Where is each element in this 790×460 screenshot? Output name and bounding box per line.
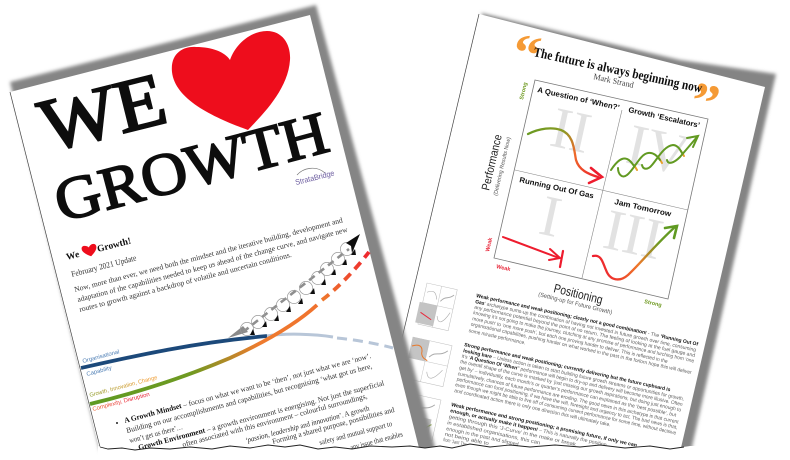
quadrant title: Jam Tomorrow bbox=[614, 197, 672, 219]
text block: growth bullets: Growth Environment – a growth environment is energising. Not just the superficial bbox=[137, 378, 385, 452]
arrow: black head bbox=[346, 234, 360, 253]
quadrant title: Running Out Of Gas bbox=[519, 175, 595, 200]
text block: growth bullets: Forming a shared purpose, possibilities and bbox=[271, 405, 396, 446]
quadrant numeral I: I bbox=[534, 182, 567, 250]
text block: introduction: routes to growth against a backdrop of volatile and uncertain conditions. bbox=[78, 250, 293, 314]
text block: growth bullets: safety and mutual support to bbox=[318, 419, 393, 447]
title: we: WE bbox=[31, 57, 174, 168]
text block: a question of when: performance can fund positioning, if we have the will, foresight and urgency to act. The bad news is that, bbox=[456, 377, 678, 431]
axis label: strong performance: Strong bbox=[519, 82, 529, 100]
text block: a question of when: it’s ‘A Question Of ‘When’’ performance will begin to dry-up and delivery will become more illusive. Often bbox=[461, 354, 683, 408]
arrow: when curve bbox=[528, 128, 602, 183]
torn paper edge bbox=[98, 444, 730, 460]
right page shadow bbox=[481, 13, 776, 451]
text block: running out of gas: any performance potential beyond the point of no return. The feeling of looking at the fuel gauge and bbox=[474, 305, 696, 359]
text block: growth bullets: won’t get us there’… bbox=[128, 422, 184, 445]
curve: growth dashed bbox=[322, 252, 369, 300]
legend label: complexity disruption: Complexity, Disruption bbox=[92, 392, 151, 413]
heading: we love growth: We bbox=[65, 250, 81, 263]
text block: a question of when: Strong performance and weak positioning; currently delivering but the future cupboard is bbox=[464, 342, 671, 393]
quadrant numeral III: III bbox=[598, 196, 669, 272]
text block: running out of gas bbox=[468, 293, 699, 376]
thumbnail: a question of when bbox=[404, 337, 452, 387]
arrow: escalator line bbox=[243, 249, 349, 332]
curve: organisational capability faded bbox=[267, 334, 333, 337]
text block: jam tomorrow: not being able to bbox=[444, 432, 490, 447]
chart: positioning and performance matrix bbox=[494, 80, 708, 299]
title: growth: GROWTH bbox=[47, 99, 335, 235]
escalator circles bbox=[240, 242, 354, 336]
text block: growth bullets: often associated with this environment – colourful surroundings, bbox=[181, 391, 368, 449]
heading: we love growth: Growth! bbox=[96, 237, 132, 255]
arrow: escalators bbox=[611, 136, 698, 176]
curve: organisational capability bbox=[81, 336, 267, 368]
legend label: growth innovation change: Growth, Innovation, Change bbox=[89, 375, 158, 399]
left page shadow bbox=[10, 5, 436, 451]
text block: running out of gas: some miracle performance. bbox=[468, 328, 526, 346]
text block: a question of when: cumulatively, chances of future performance are eroding. The good news in this archetype is that current bbox=[457, 371, 680, 426]
text block: running out of gas: organisational capabilities, pushing harder on what worked in the past in the forlorn hope this will deliver bbox=[470, 322, 692, 376]
text block: growth bullets: Building on our accomplishments and capabilities, but recognising ‘what got us here, bbox=[125, 361, 373, 435]
logo: StrataBridge: StrataBridge bbox=[294, 169, 335, 187]
quadrant numeral II: II bbox=[545, 94, 597, 166]
text block: running out of gas: knowing it’s not going to make the journey, clutching at any promise of performance and lurching from ‘one bbox=[473, 310, 695, 365]
arrow: running out of gas bbox=[503, 237, 563, 267]
quadrant numeral IV: IV bbox=[621, 111, 695, 188]
curve: growth bbox=[90, 305, 317, 404]
axis label: strong positioning: Strong bbox=[644, 299, 662, 309]
axis subtitle: positioning: (Setting-up for Future Growth) bbox=[538, 292, 613, 316]
heading: we love growth bbox=[65, 237, 132, 263]
escalator darts bbox=[250, 249, 356, 335]
panel: right page bbox=[375, 14, 765, 452]
arrow: jam tomorrow bbox=[593, 226, 677, 279]
text block: a question of when: looking bare – Unless action is taken to start building future growth streams or opportunities for growth, bbox=[463, 348, 685, 402]
bullet bbox=[116, 422, 118, 424]
text block: a question of when: get by’ – individually, each month’s or quarter’s performance can explained as the ‘best possible’, but bbox=[459, 365, 677, 419]
thumbnail: jam tomorrow bbox=[389, 391, 441, 450]
axis title: positioning: Positioning bbox=[552, 281, 604, 307]
text block: a question of when: and coordinated action there is only one direction this will ultimately take. bbox=[454, 388, 611, 428]
text block: growth bullets bbox=[116, 351, 404, 452]
text block: introduction: adaptation of the capabilities needed to keep us ahead of the change curve, and navigate new bbox=[76, 225, 349, 304]
legend label: organisational: Organisational bbox=[82, 349, 120, 365]
text block: jam tomorrow: enough, or actually make it happen! – This is naturally the position bbox=[450, 408, 607, 448]
icon: small heart bbox=[82, 244, 96, 256]
axis label: weak positioning: Weak bbox=[496, 264, 512, 273]
text block: running out of gas: Gas’ archetype sums-up the combination of having not invested in future growth over time, consuming bbox=[475, 299, 697, 354]
closing quote mark: ” bbox=[685, 70, 725, 135]
quadrant title: Growth ‘Escalators’ bbox=[628, 105, 701, 130]
axis label: weak performance: Weak bbox=[485, 236, 494, 252]
quote heading: The future is always beginning now bbox=[532, 44, 704, 96]
text block: growth bullets: A Growth Mindset – focus on what we want to be ‘then’, not just what we are ‘now’. bbox=[123, 351, 372, 425]
text block: jam tomorrow: Weak performance and strong positioning; a promising future, if only we can bbox=[451, 402, 637, 449]
axis title: performance: Performance bbox=[480, 133, 505, 192]
text block: growth bullets: any issue that enables bbox=[349, 429, 404, 452]
arrow: escalator tail bbox=[228, 326, 248, 338]
quadrant title: A Question of ‘When?’ bbox=[537, 85, 621, 112]
text block: running out of gas: more push’ to ‘one more push’, but each one proving harder to deliver. This is reflected in the bbox=[472, 316, 668, 365]
legend label: capability: Capability bbox=[86, 365, 113, 378]
quote author: Mark Strand bbox=[593, 71, 635, 90]
panel: left page bbox=[10, 15, 420, 452]
text block: running out of gas: Weak performance and weak positioning; clearly not a good combination! - The ‘Running Out Of bbox=[476, 293, 699, 348]
curve: organisational capability dashed bbox=[337, 338, 393, 348]
text: date line: February 2021 Update bbox=[70, 253, 138, 279]
text block: a question of when: the overall shape of the curve is masked by ‘just missing our growth aspirations, but doing just enough to bbox=[460, 359, 682, 414]
text block: introduction: Now, more than ever, we need both the mindset and the iterative building, development and bbox=[73, 215, 344, 294]
thumbnail: running out of gas bbox=[415, 282, 457, 331]
text block: jam tomorrow: from ‘Jam’ The bbox=[443, 437, 467, 448]
axis subtitle: performance: (Delivering Results Now) bbox=[493, 137, 512, 196]
text block: a question of when bbox=[454, 342, 685, 437]
text block: a question of when: even though we might be able to live off of consuming current performance for some time, without decisive bbox=[455, 382, 677, 437]
icon: big red heart bbox=[172, 31, 290, 130]
text block: jam tomorrow: in established organisations, this can bbox=[447, 420, 541, 446]
chart: growth curves bbox=[81, 234, 393, 404]
text block: jam tomorrow: enough in the past and slipped bbox=[446, 426, 519, 448]
text block: growth bullets: ‘passion, leadership and innovation’. A growth bbox=[244, 403, 370, 445]
opening quote mark: “ bbox=[506, 21, 546, 86]
text block: jam tomorrow: getting through this ‘J-Curve’ in the make or break bbox=[448, 414, 577, 448]
